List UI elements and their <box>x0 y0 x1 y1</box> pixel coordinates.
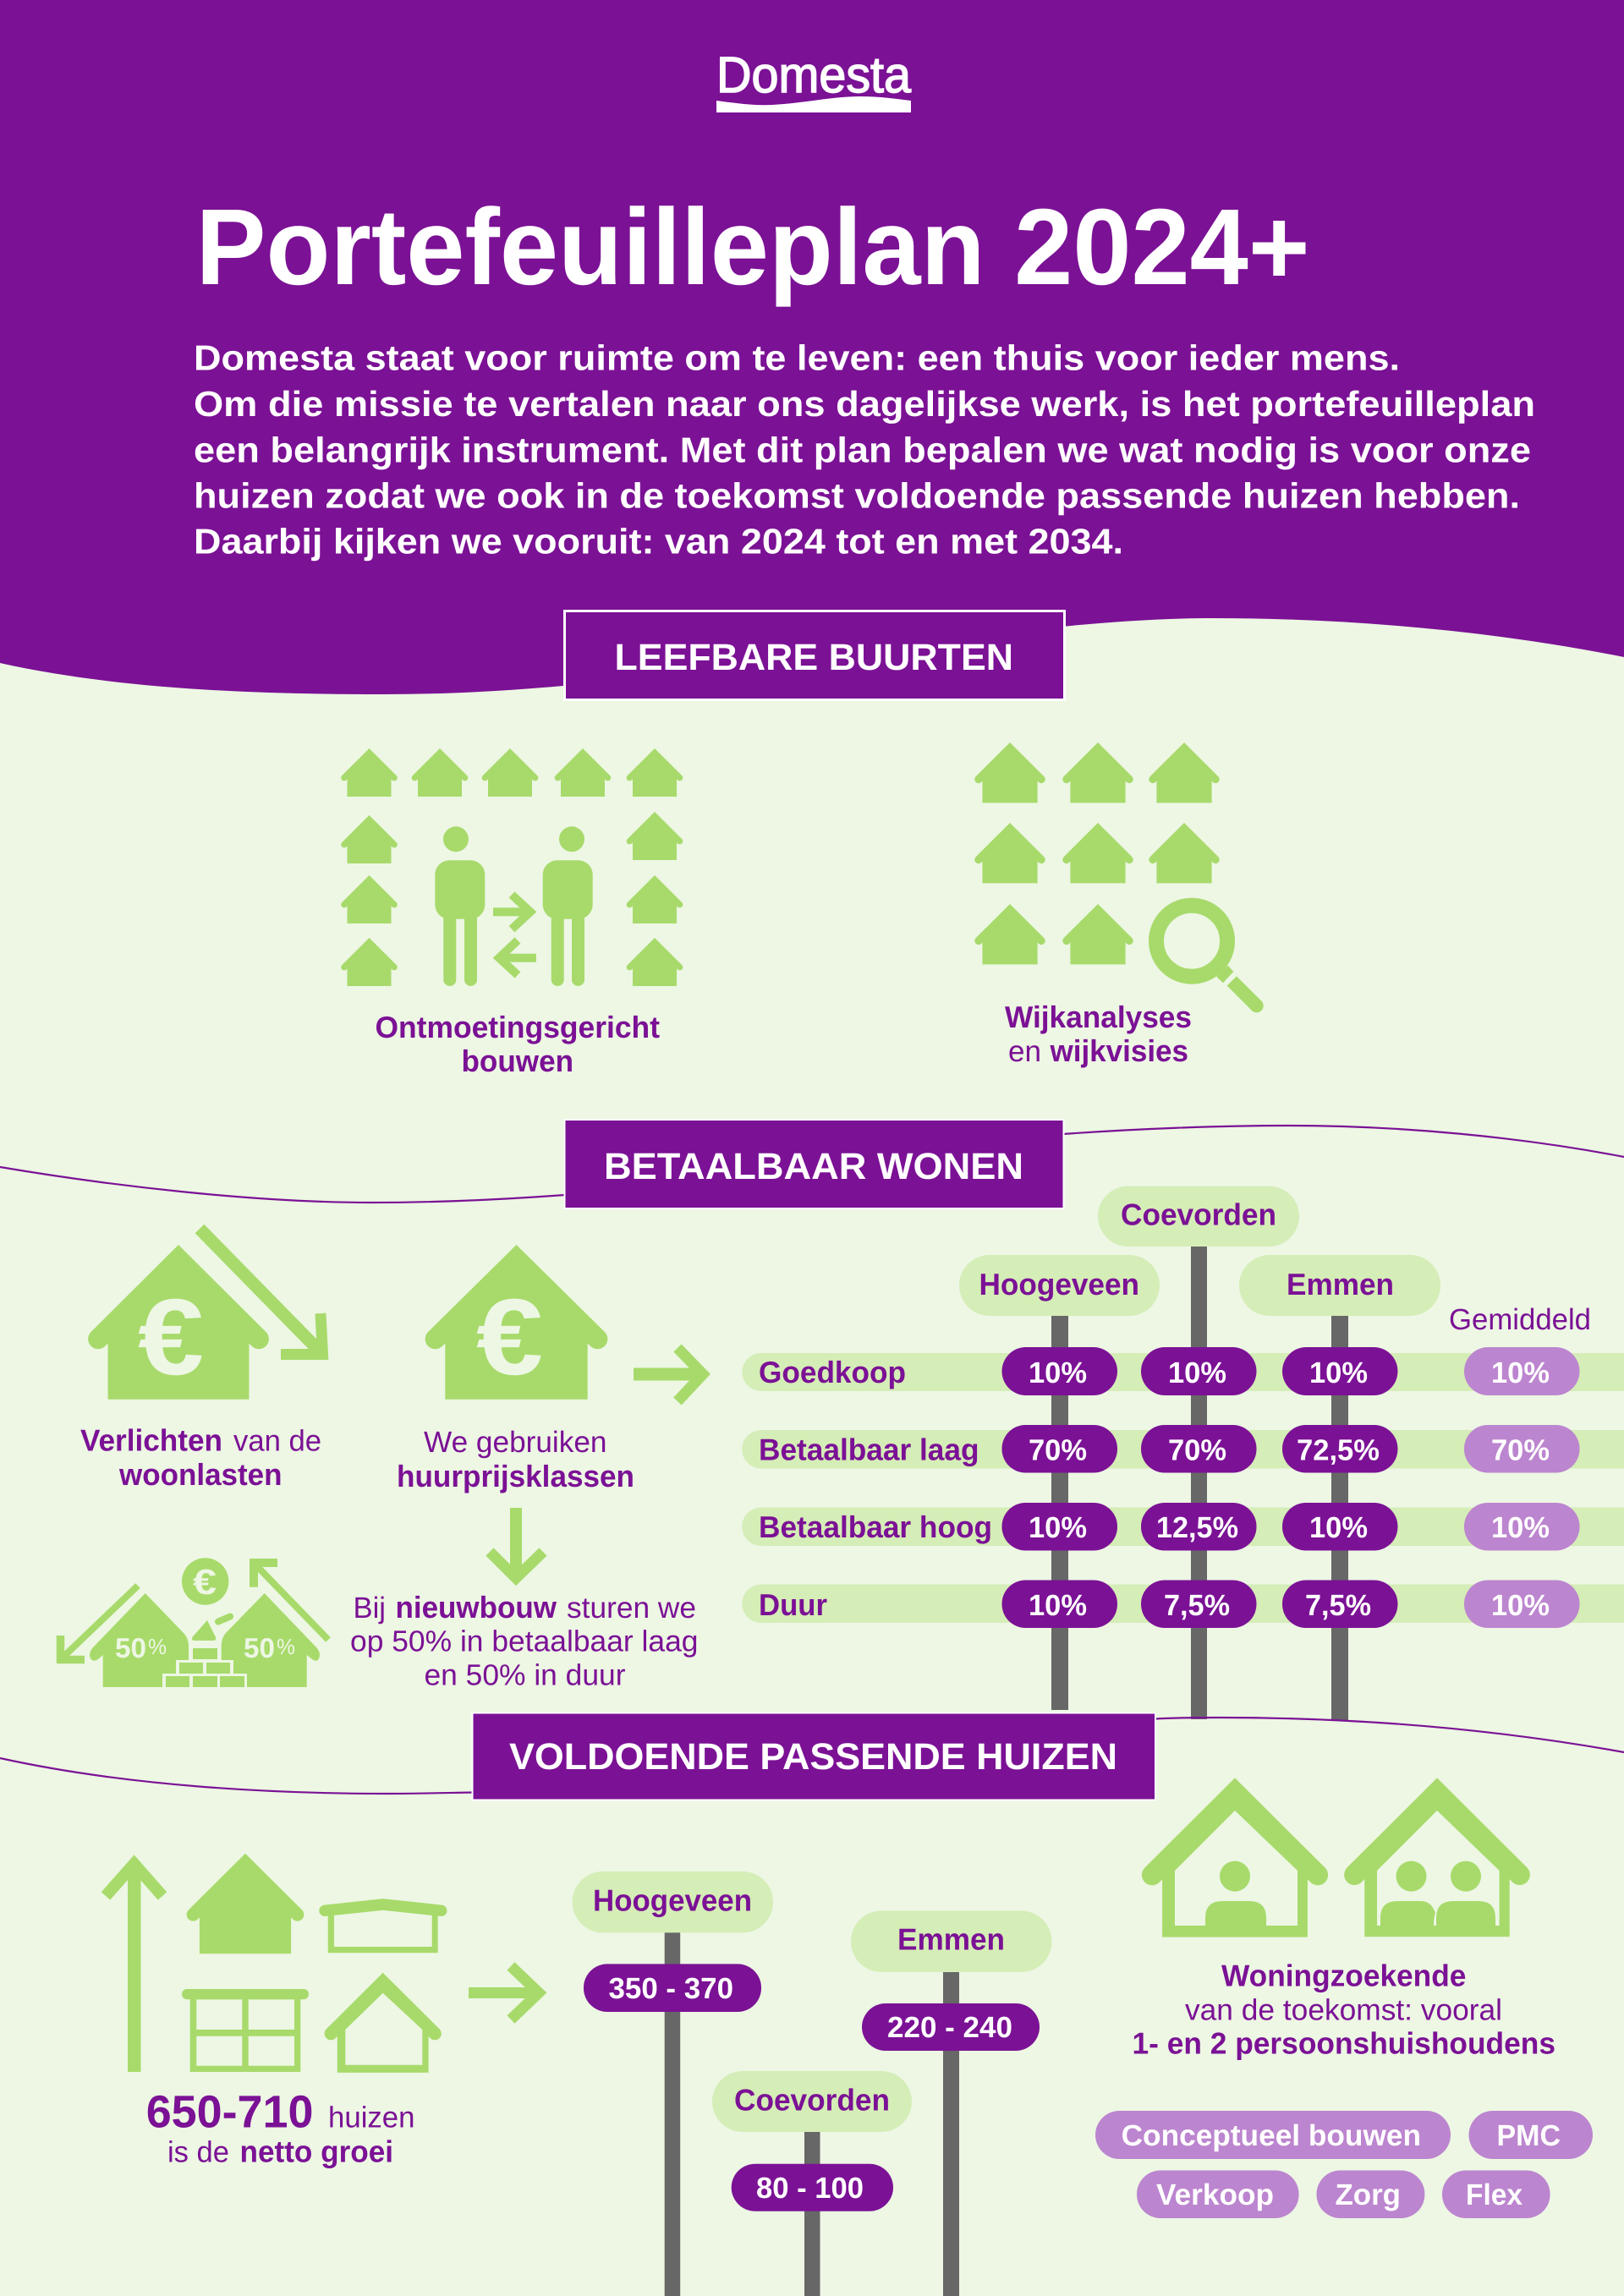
text: nieuwbouw: sturen we <box>567 1592 696 1625</box>
icon: two houses 50% with bricks and euro coin <box>61 1558 328 1687</box>
marker: Emmen 220-240: 220 - 240 <box>887 2011 1012 2044</box>
heading: Betaalbaar wonen <box>565 1120 1064 1208</box>
header band <box>0 0 1624 694</box>
row: Betaalbaar laag: 70% <box>1491 1434 1550 1466</box>
heading: Voldoende passende huizen <box>472 1713 1155 1800</box>
caption: Ontmoetingsgericht bouwen: bouwen <box>462 1044 573 1078</box>
icon: two houses 50% with bricks and euro coin: 50 <box>115 1632 146 1663</box>
row: Goedkoop: 10% <box>1491 1356 1550 1389</box>
tag: PMC <box>1468 2111 1593 2159</box>
row: Betaalbaar hoog: 10% <box>1309 1511 1368 1544</box>
icon: house with one person <box>1142 1778 1328 1937</box>
row: Betaalbaar laag: 70% <box>1029 1434 1087 1466</box>
icon: house with two people <box>1344 1778 1530 1937</box>
caption: Ontmoetingsgericht bouwen <box>376 1010 660 1078</box>
intro text: een belangrijk instrument. Met dit plan bepalen we wat nodig is voor onze <box>194 430 1531 470</box>
text: nieuwbouw: op 50% in betaalbaar laag <box>350 1625 699 1658</box>
marker: Hoogeveen 350-370: 350 - 370 <box>609 1972 733 2005</box>
row: Betaalbaar laag: 70% <box>1168 1434 1226 1466</box>
arrow: to regions <box>469 1966 541 2019</box>
tag: Flex <box>1442 2170 1550 2218</box>
row: Betaalbaar hoog: 10% <box>1029 1511 1087 1544</box>
row: Goedkoop: 10% <box>1168 1356 1226 1389</box>
icon: house with euro and down arrow <box>88 1229 323 1400</box>
text: We gebruiken huurprijsklassen: huurprijsklassen <box>397 1459 634 1493</box>
tag: Conceptueel bouwen: Conceptueel bouwen <box>1122 2119 1421 2152</box>
text: We gebruiken huurprijsklassen <box>397 1426 634 1493</box>
table: rent classes per region <box>742 1186 1624 1721</box>
icon: house with euro <box>425 1245 607 1400</box>
tag: Conceptueel bouwen <box>1095 2111 1451 2159</box>
icon: houses around two people <box>341 748 683 986</box>
pill: Emmen: Emmen <box>1287 1267 1394 1301</box>
row: Duur: 7,5% <box>1164 1589 1230 1622</box>
text: Woningzoekende <box>1132 1959 1555 2061</box>
text: Verlichten van de woonlasten: woonlasten <box>118 1457 283 1492</box>
row: Duur: Duur <box>759 1587 827 1622</box>
row: Betaalbaar hoog: 10% <box>1491 1511 1550 1544</box>
heading: Leefbare buurten: LEEFBARE BUURTEN <box>614 637 1013 678</box>
outline house <box>325 1973 442 2073</box>
caption: Wijkanalyses en wijkvisies: Wijkanalyses <box>1005 1000 1192 1034</box>
caption: Wijkanalyses en wijkvisies <box>1005 1000 1192 1068</box>
row bars <box>742 1353 1624 1623</box>
text: Verlichten van de woonlasten: Verlichten <box>80 1422 222 1458</box>
marker: Hoogeveen 350-370 <box>573 1871 773 2296</box>
row: Goedkoop: Goedkoop <box>759 1355 906 1389</box>
tag: Verkoop: Verkoop <box>1156 2178 1274 2211</box>
caption: Ontmoetingsgericht bouwen: Ontmoetingsgericht <box>376 1010 660 1044</box>
text: We gebruiken huurprijsklassen: We gebruiken <box>424 1426 607 1459</box>
pill: Coevorden: Coevorden <box>1121 1197 1276 1231</box>
marker: Coevorden 80-100: Coevorden <box>734 2082 890 2118</box>
text: nieuwbouw <box>350 1590 699 1691</box>
intro text: huizen zodat we ook in de toekomst voldoende passende huizen hebben. <box>194 475 1520 516</box>
row: Betaalbaar laag <box>759 1425 1580 1473</box>
row: Betaalbaar hoog <box>759 1503 1580 1551</box>
text: Woningzoekende: Woningzoekende <box>1221 1959 1466 1993</box>
icon: two houses 50% with bricks and euro coin: % <box>148 1634 167 1659</box>
icon: house with euro: € <box>476 1277 543 1398</box>
icon: two houses 50% with bricks and euro coin: % <box>277 1634 295 1659</box>
row: Duur: 10% <box>1029 1589 1087 1622</box>
pill: Emmen <box>1239 1255 1440 1316</box>
arrow: to table <box>634 1348 703 1401</box>
caption: Wijkanalyses en wijkvisies: en <box>1008 1035 1041 1068</box>
text: nieuwbouw: Bij <box>354 1592 386 1625</box>
caravan <box>325 1904 442 1953</box>
row: Betaalbaar laag: 72,5% <box>1297 1434 1380 1466</box>
pill: Hoogeveen <box>959 1255 1160 1316</box>
row: Betaalbaar hoog: Betaalbaar hoog <box>759 1510 992 1544</box>
icon: house with euro and down arrow: € <box>138 1277 204 1398</box>
tags: building programmes <box>1095 2111 1593 2218</box>
row: Duur: 7,5% <box>1305 1589 1371 1622</box>
caption: Wijkanalyses en wijkvisies: wijkvisies <box>1050 1033 1188 1068</box>
logo: Domesta: Domesta <box>716 47 912 103</box>
tag: Zorg: Zorg <box>1335 2178 1401 2211</box>
pill: Coevorden <box>1098 1186 1299 1247</box>
marker: Coevorden 80-100: 80 - 100 <box>756 2172 864 2205</box>
poles <box>1051 1247 1348 1721</box>
row: Goedkoop: 10% <box>1309 1356 1368 1389</box>
tag: Verkoop <box>1137 2170 1299 2218</box>
icon: up arrow and four dwelling types <box>106 1854 442 2073</box>
intro text: Domesta staat voor ruimte om te leven: een thuis voor ieder mens. <box>194 338 1400 377</box>
icon: two houses 50% with bricks and euro coin: € <box>193 1562 217 1602</box>
text: Woningzoekende: van de toekomst: vooral <box>1185 1994 1502 2027</box>
text: 650-710 huizen netto groei: netto groei <box>240 2134 393 2169</box>
title: Portefeuilleplan 2024+ <box>196 187 1309 308</box>
text: nieuwbouw: nieuwbouw <box>396 1590 557 1625</box>
text: Verlichten van de woonlasten <box>80 1422 321 1492</box>
window block <box>182 1989 309 2072</box>
row: Goedkoop <box>759 1347 1580 1395</box>
heading: Betaalbaar wonen: BETAALBAAR WONEN <box>604 1146 1023 1187</box>
pill: Hoogeveen: Hoogeveen <box>979 1267 1139 1301</box>
intro text: Daarbij kijken we vooruit: van 2024 tot en met 2034. <box>194 521 1123 562</box>
text: 650-710 huizen netto groei <box>146 2087 414 2169</box>
text: 650-710 huizen netto groei: is de <box>167 2136 229 2169</box>
text: 650-710 huizen netto groei: 650-710 <box>146 2087 313 2138</box>
row: Goedkoop: 10% <box>1029 1356 1087 1389</box>
marker: Emmen 220-240 <box>851 1911 1052 2296</box>
icon: houses with magnifier <box>974 743 1264 1012</box>
marker: Hoogeveen 350-370: Hoogeveen <box>593 1882 752 1918</box>
intro text: Om die missie te vertalen naar ons dagelijkse werk, is het portefeuilleplan <box>194 384 1535 424</box>
heading: Voldoende passende huizen: VOLDOENDE PASSENDE HUIZEN <box>509 1736 1117 1778</box>
row: Duur <box>759 1580 1580 1628</box>
intro text <box>194 338 1535 562</box>
tag: PMC: PMC <box>1497 2119 1561 2152</box>
heading: Leefbare buurten <box>565 611 1064 700</box>
text: 650-710 huizen netto groei: huizen <box>328 2101 414 2134</box>
row: Betaalbaar hoog: 12,5% <box>1156 1511 1238 1544</box>
tag: Zorg <box>1316 2170 1424 2218</box>
row: Betaalbaar laag: Betaalbaar laag <box>759 1433 979 1466</box>
text: nieuwbouw: en 50% in duur <box>425 1659 626 1691</box>
tag: Flex: Flex <box>1466 2178 1522 2211</box>
row: Duur: 10% <box>1491 1589 1550 1622</box>
text: Verlichten van de woonlasten: van de <box>233 1424 321 1458</box>
icon: two houses 50% with bricks and euro coin: 50 <box>244 1632 275 1663</box>
marker: Emmen 220-240: Emmen <box>897 1922 1005 1957</box>
label: Gemiddeld: Gemiddeld <box>1449 1303 1591 1336</box>
arrow: down <box>490 1508 543 1578</box>
text: Woningzoekende: 1- en 2 persoonshuishoudens <box>1132 2026 1555 2061</box>
marker: Coevorden 80-100 <box>712 2071 912 2296</box>
